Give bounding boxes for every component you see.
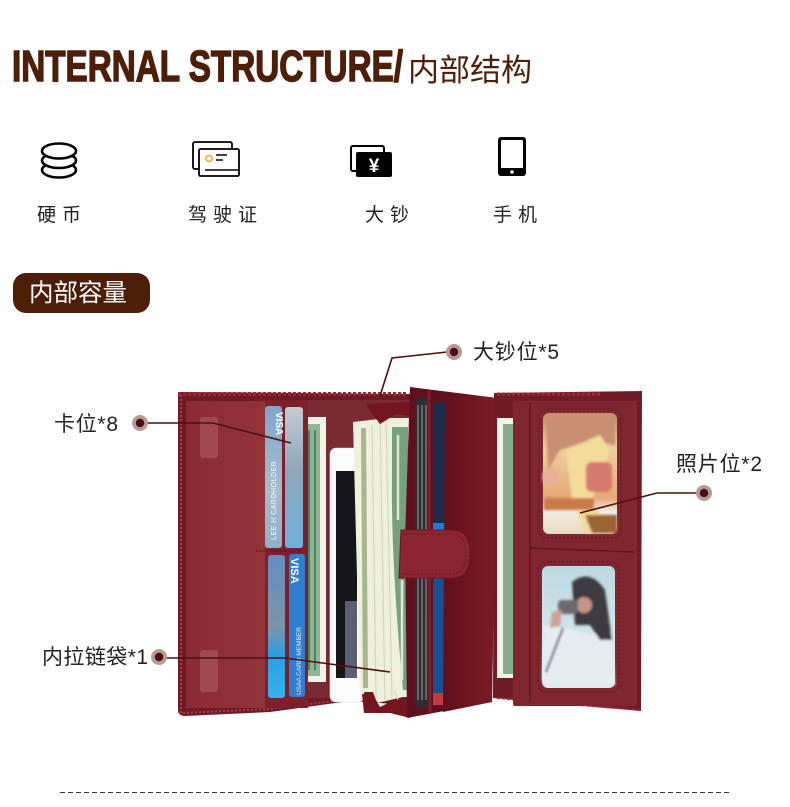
heading pill: interior capacity: [13, 273, 150, 313]
centre flap of wallet: [405, 387, 497, 718]
callout: photo slots: 照片位*2: [676, 453, 762, 476]
callout: photo slots: [580, 453, 762, 513]
photo window: upper: [542, 413, 617, 534]
callout: inner zip pocket: [42, 646, 390, 672]
title: INTERNAL STRUCTURE/: [12, 42, 403, 91]
label: banknotes: 大钞: [365, 204, 415, 226]
bill behind card slots: [305, 417, 326, 682]
label: driving licence: 驾驶证: [188, 204, 263, 226]
credit cards: VISA: [273, 412, 284, 435]
icon: banknotes: [351, 146, 392, 177]
icon: phone: [498, 137, 526, 176]
card slot backing: [262, 400, 308, 708]
stack of banknotes: [353, 418, 410, 703]
left leather flap: [186, 401, 300, 708]
right wing of wallet: [493, 391, 642, 711]
heading pill: interior capacity: 内部容量: [29, 279, 127, 307]
credit cards: VISA: [288, 558, 300, 584]
title: 内部结构: [408, 53, 532, 88]
credit cards: USAA CARD MEMBER: [296, 627, 303, 695]
wallet photo: [178, 387, 642, 718]
left wing of wallet: [178, 392, 410, 716]
icon: coins: [42, 144, 76, 178]
icon: banknotes: ¥: [369, 156, 380, 177]
callout: card slots: [54, 413, 291, 443]
snap strap: [399, 530, 470, 578]
label: phone: 手机: [493, 204, 543, 226]
photo window: lower: [542, 566, 615, 688]
credit cards: [265, 406, 305, 698]
callout: bill slots: 大钞位*5: [473, 341, 559, 364]
credit cards: LEE H CARDHOLDER: [271, 461, 278, 540]
label: coins: 硬币: [37, 204, 87, 226]
phone in wallet: [330, 448, 364, 702]
icon: driving licence: [193, 142, 239, 176]
callout: inner zip pocket: 内拉链袋*1: [42, 646, 148, 669]
callout: bill slots: [380, 341, 559, 396]
callout: card slots: 卡位*8: [54, 413, 118, 436]
accordion gussets: [362, 402, 410, 718]
